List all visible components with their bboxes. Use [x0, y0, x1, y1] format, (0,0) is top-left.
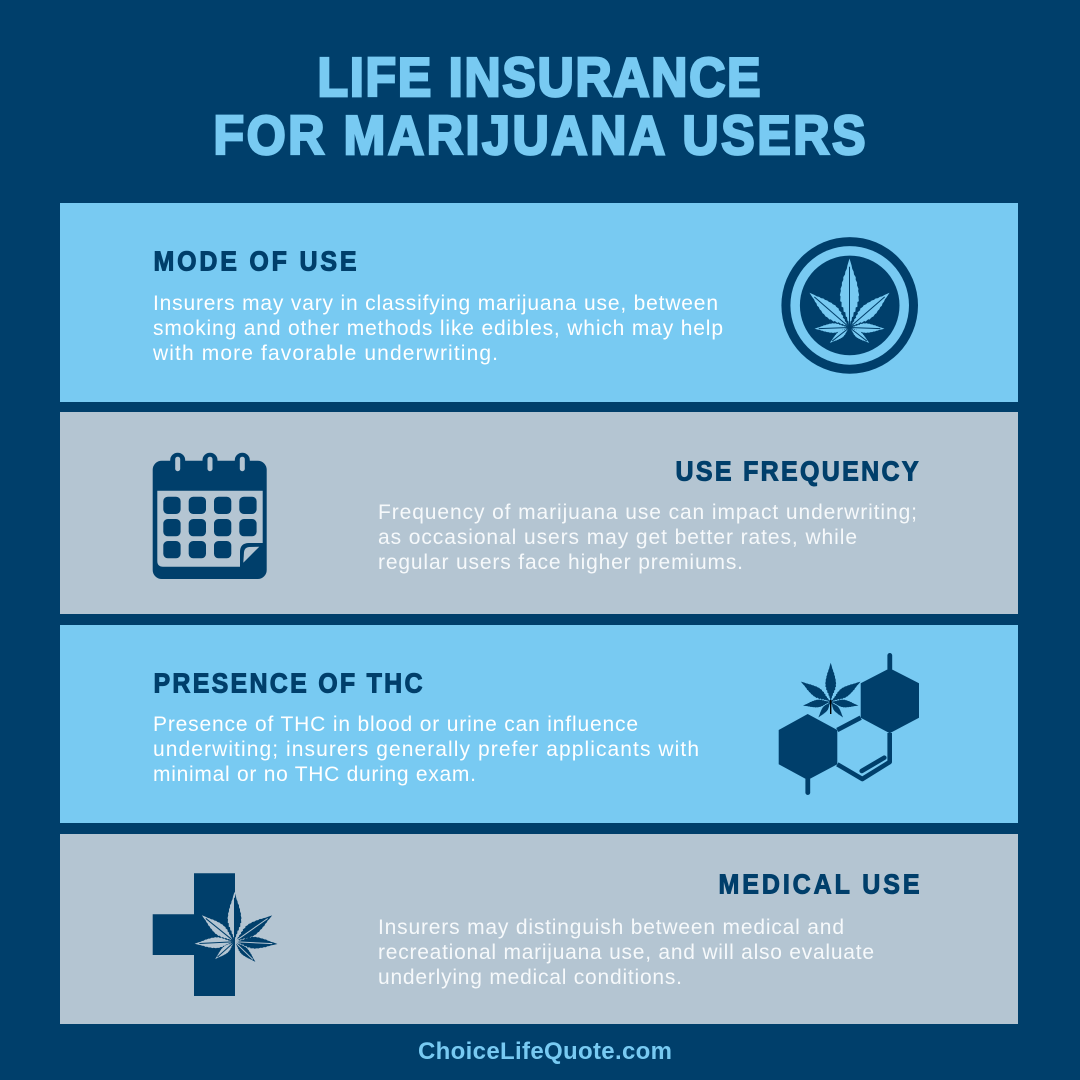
- text block: presence of THC: Presence of THC in blood or urine can influence: [153, 713, 638, 736]
- text block: mode of use: [152, 292, 723, 365]
- icon: medical cross with leaf: [153, 873, 278, 996]
- heading: use frequency: USE FREQUENCY: [676, 455, 919, 487]
- icon: THC molecule with leaf: [779, 653, 919, 795]
- text block: presence of THC: underwiting; insurers generally prefer applicants with: [153, 738, 699, 761]
- text block: mode of use: Insurers may vary in classifying marijuana use, between: [153, 292, 718, 315]
- text block: medical use: recreational marijuana use, and will also evaluate: [378, 941, 874, 964]
- text block: medical use: Insurers may distinguish between medical and: [378, 916, 844, 939]
- text block: use frequency: as occasional users may get better rates, while: [378, 526, 857, 549]
- heading: mode of use: MODE OF USE: [154, 245, 356, 277]
- icon: calendar: [153, 453, 267, 579]
- text block: medical use: [378, 916, 874, 989]
- icon: leaf in circle: [781, 237, 918, 374]
- text block: use frequency: regular users face higher premiums.: [378, 551, 743, 574]
- text block: mode of use: with more favorable underwriting.: [152, 342, 498, 365]
- heading: presence of THC: PRESENCE OF THC: [154, 667, 422, 699]
- text block: use frequency: Frequency of marijuana use can impact underwriting;: [378, 501, 917, 524]
- text block: presence of THC: [153, 713, 699, 786]
- panel: presence of THC: [60, 625, 1018, 823]
- title: FOR MARIJUANA USERS: [214, 105, 866, 166]
- text block: use frequency: [378, 501, 917, 574]
- text block: medical use: underlying medical conditions.: [378, 966, 682, 989]
- heading: medical use: MEDICAL USE: [718, 868, 920, 900]
- text block: mode of use: smoking and other methods like edibles, which may help: [153, 317, 723, 340]
- panel: mode of use: [60, 203, 1018, 402]
- footer website: ChoiceLifeQuote.com: [418, 1038, 672, 1065]
- title: [214, 47, 866, 166]
- panel: medical use: [60, 834, 1018, 1024]
- text block: presence of THC: minimal or no THC during exam.: [153, 763, 476, 786]
- panel: use frequency: [60, 412, 1018, 614]
- title: LIFE INSURANCE: [318, 47, 760, 109]
